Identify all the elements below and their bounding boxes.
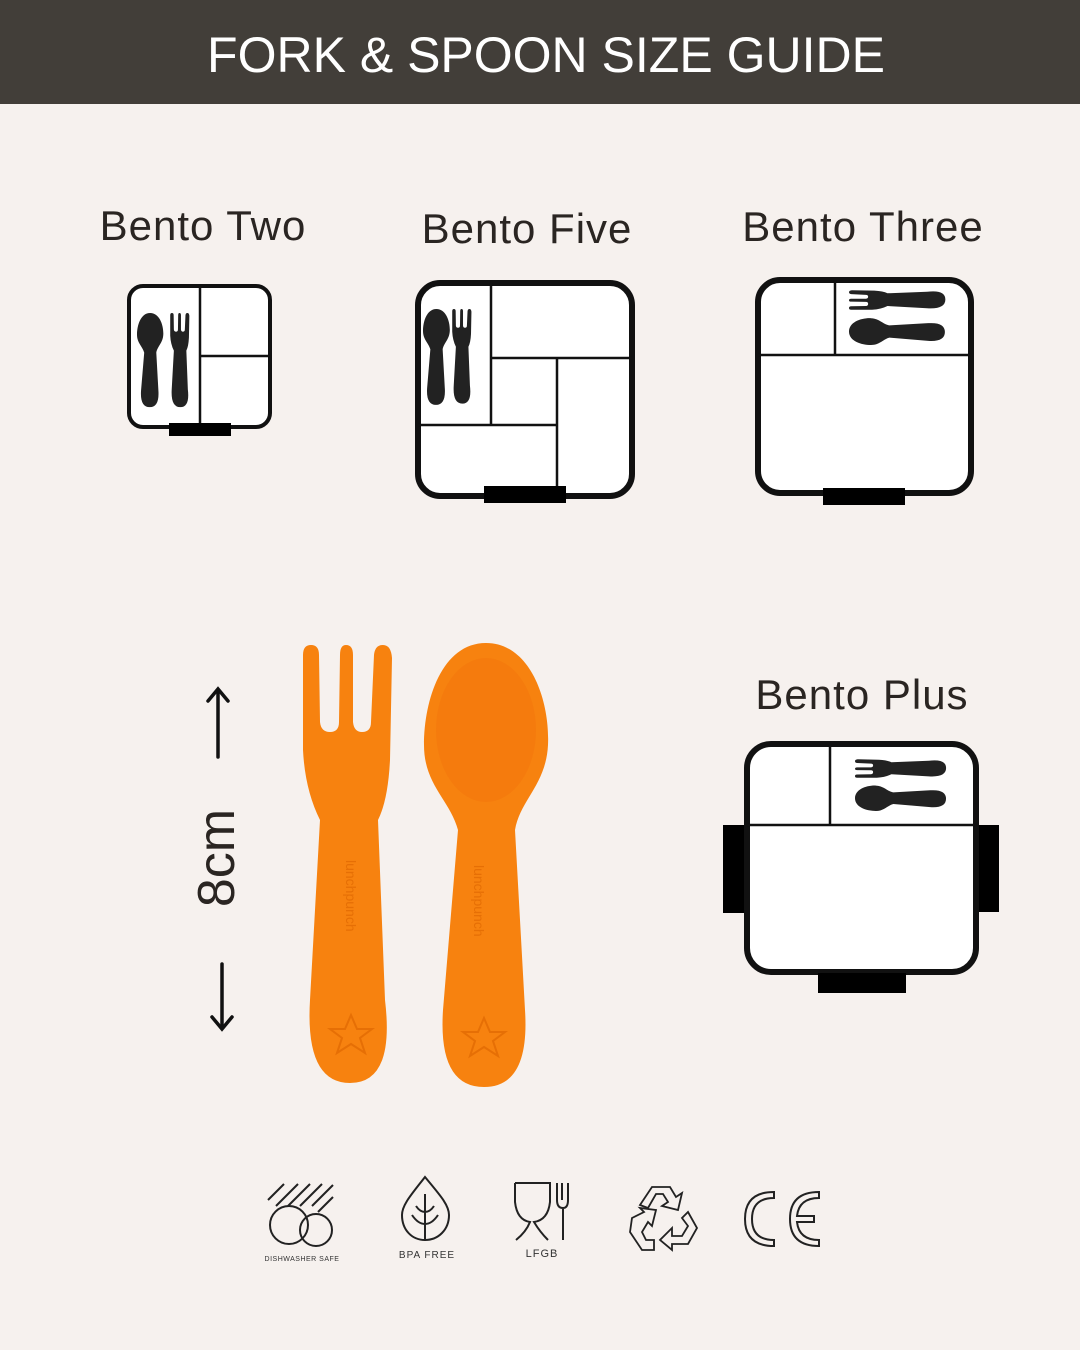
orange spoon — [424, 643, 548, 1087]
icon: CE mark — [745, 1192, 819, 1246]
dimension label 8cm: 8cm — [188, 809, 246, 907]
orange fork: lunchpunch — [343, 860, 359, 932]
heading: Bento Five: Bento Five — [422, 205, 632, 252]
icon: BPA free — [399, 1177, 455, 1261]
label dishwasher: DISHWASHER SAFE — [265, 1256, 339, 1263]
title: FORK & SPOON SIZE GUIDE — [207, 27, 885, 83]
icon: Bento Two box — [129, 286, 270, 436]
icon: recycle — [630, 1187, 697, 1250]
icon: dishwasher safe — [265, 1184, 339, 1263]
icon: Bento Plus box — [723, 744, 999, 993]
heading: Bento Three: Bento Three — [742, 203, 984, 250]
icon: Bento Three box — [758, 280, 971, 505]
arrow: down — [212, 964, 232, 1029]
header bar — [0, 0, 1080, 104]
heading: Bento Two: Bento Two — [100, 202, 306, 249]
heading: Bento Plus: Bento Plus — [755, 671, 969, 718]
icon: LFGB — [515, 1183, 568, 1260]
orange spoon: lunchpunch — [471, 865, 487, 937]
orange fork — [303, 645, 392, 1083]
label BPA: BPA FREE — [399, 1250, 455, 1261]
label LFGB: LFGB — [526, 1248, 558, 1260]
arrow: up — [208, 689, 228, 757]
icon: Bento Five box — [418, 283, 632, 503]
